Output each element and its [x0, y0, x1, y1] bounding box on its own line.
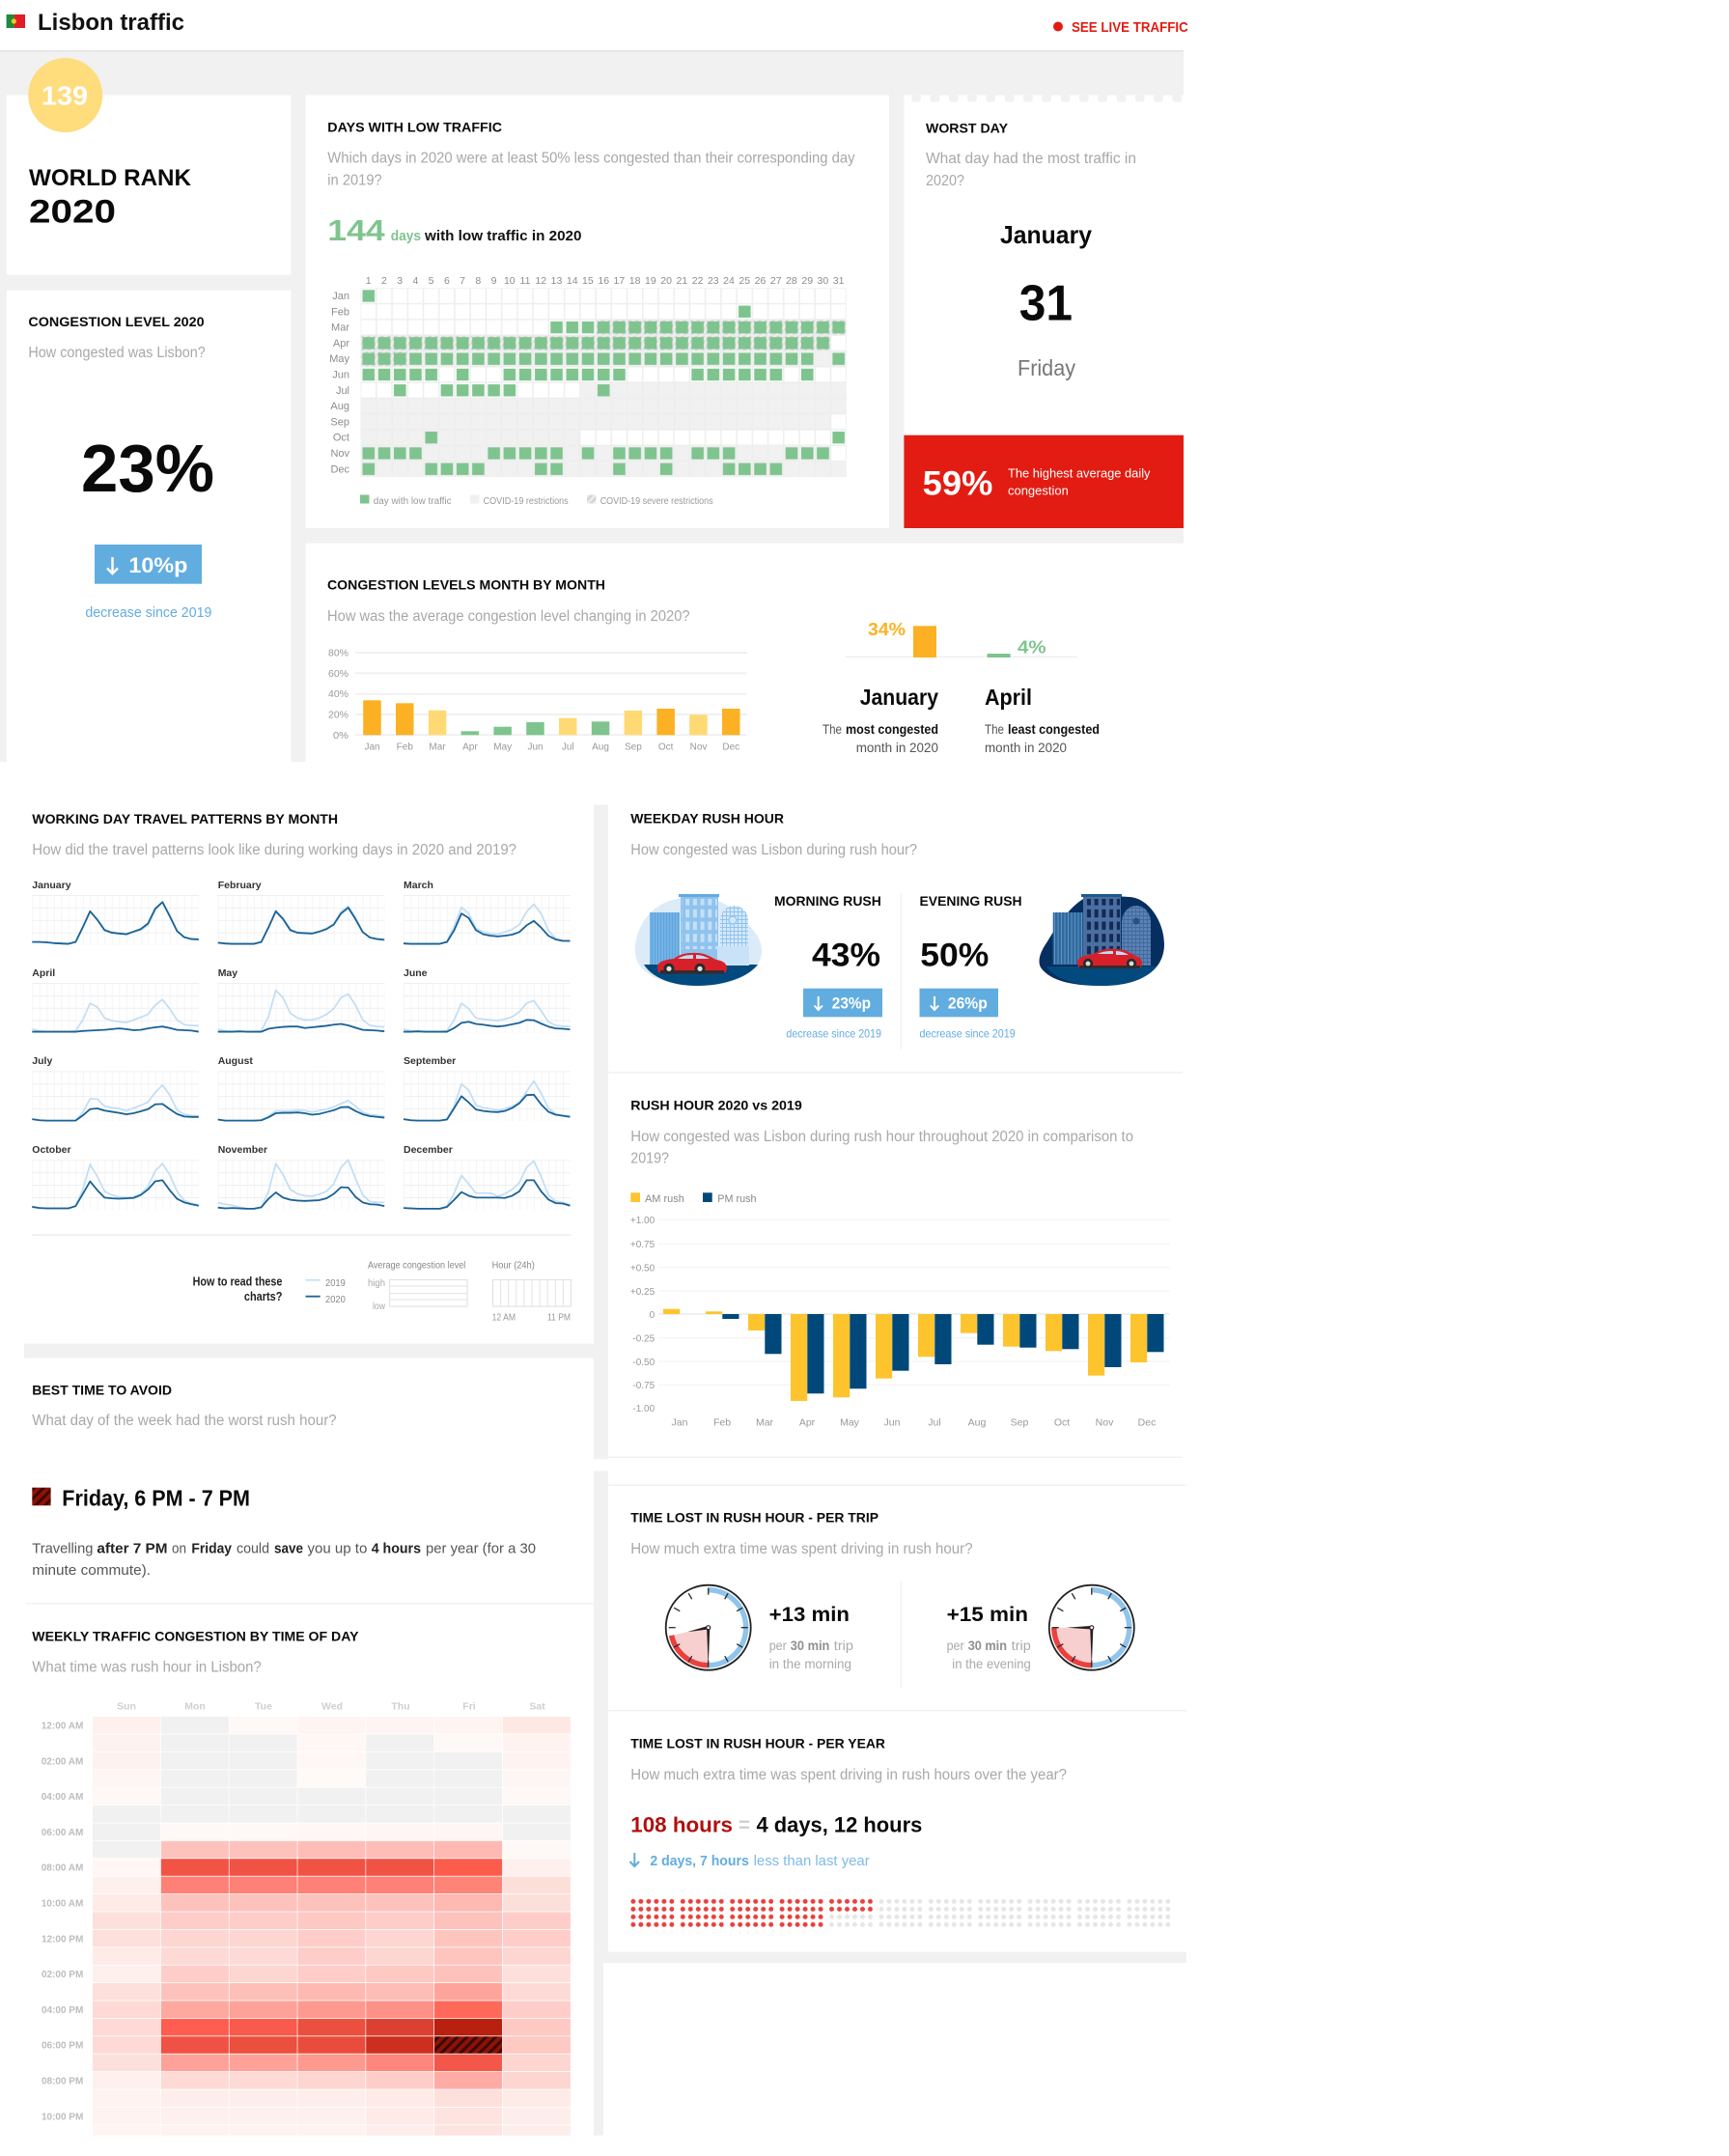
least congested month: The — [985, 722, 1004, 737]
total hours: 108 hours — [630, 1812, 733, 1836]
calendar day numbers: 22 — [692, 275, 704, 287]
chart key: Average congestion level — [368, 1261, 465, 1271]
rank year: 2020 — [29, 193, 116, 230]
big number: 23% — [81, 431, 214, 506]
heatmap hour labels: 06:00 PM — [42, 2041, 83, 2052]
live traffic link: SEE LIVE TRAFFIC — [1072, 19, 1188, 36]
heatmap hour labels: 02:00 PM — [42, 1970, 83, 1980]
bar chart: rush hour change: +0.25 — [630, 1287, 655, 1298]
chart key: 2020 — [325, 1294, 346, 1305]
small multiple: December — [404, 1144, 571, 1210]
change note: decrease since 2019 — [85, 604, 211, 621]
small multiple: July: July — [32, 1055, 52, 1067]
bar chart: rush hour change: May — [840, 1417, 860, 1429]
calendar day numbers: 25 — [739, 275, 750, 287]
morning time lost: in the morning — [769, 1657, 851, 1671]
calendar day numbers: 14 — [567, 275, 578, 287]
small multiple: December: December — [404, 1144, 453, 1156]
morning time lost: 30 min — [791, 1638, 829, 1653]
calendar month labels: Dec — [330, 463, 349, 475]
heatmap hour labels: 02:00 AM — [42, 1756, 83, 1767]
calendar day numbers: 21 — [676, 275, 687, 287]
panel: rush hour 2020 vs 2019 — [630, 1097, 1170, 1429]
heatmap cells — [93, 1717, 571, 2142]
icon: Portugal flag — [7, 14, 25, 28]
calendar month labels: Nov — [330, 448, 349, 460]
question — [327, 151, 855, 189]
heatmap hour labels: 08:00 AM — [42, 1863, 83, 1874]
small multiple: October: October — [32, 1144, 71, 1156]
divider — [32, 1234, 572, 1236]
bar chart: rush hour change — [630, 1216, 1170, 1429]
restriction shading — [361, 320, 847, 477]
morning time lost — [769, 1604, 853, 1671]
bar chart: monthly congestion: Nov — [690, 742, 707, 753]
icon: evening clock — [1049, 1585, 1134, 1670]
small multiple: May: May — [218, 967, 237, 979]
calendar day numbers: 1 — [366, 275, 372, 287]
heatmap weekday labels: Tue — [255, 1701, 272, 1713]
calendar grid — [361, 288, 847, 477]
evening rush stats: EVENING RUSH — [919, 893, 1022, 909]
heatmap hour labels — [42, 1721, 83, 2122]
most congested month: most congested — [846, 722, 938, 737]
bar chart: rush hour change: 0 — [650, 1310, 655, 1321]
stat: 144 days: days — [391, 228, 421, 244]
heatmap weekday labels: Wed — [321, 1701, 343, 1713]
bar chart: monthly congestion: Oct — [658, 742, 674, 753]
small multiple: August: August — [218, 1055, 253, 1067]
stat: 144 days: 144 — [327, 213, 386, 247]
chart key — [193, 1261, 572, 1323]
bar chart: rush hour change: Feb — [713, 1417, 731, 1429]
bar chart: monthly congestion: Feb — [397, 742, 413, 753]
question: Which days in 2020 were at least 50% less congested than their corresponding day — [327, 151, 855, 166]
question: How congested was Lisbon during rush hour throughout 2020 in comparison to — [630, 1129, 1133, 1145]
callout: highest daily congestion: congestion — [1008, 483, 1069, 498]
calendar day numbers: 17 — [614, 275, 625, 287]
bar chart: monthly congestion: 60% — [328, 669, 349, 680]
calendar day numbers: 2 — [381, 275, 387, 287]
panel: congestion level — [7, 291, 292, 762]
panel: worst day — [904, 96, 1184, 435]
calendar day numbers: 29 — [801, 275, 813, 287]
calendar day numbers: 8 — [475, 275, 481, 287]
most congested month — [823, 685, 938, 755]
small multiple: February: February — [218, 880, 262, 891]
icon: morning clock — [666, 1585, 751, 1670]
heatmap hour labels: 10:00 AM — [42, 1898, 83, 1910]
evening time lost: trip — [1012, 1638, 1031, 1653]
heading: TIME LOST IN RUSH HOUR - PER YEAR — [630, 1736, 885, 1751]
bar chart: rush hour change: Jul — [928, 1417, 941, 1429]
question: How much extra time was spent driving in rush hours over the year? — [630, 1767, 1067, 1783]
evening rush stats: decrease since 2019 — [919, 1027, 1016, 1041]
panel: weekday rush hour — [630, 811, 1164, 1050]
bar chart: monthly congestion: Jan — [364, 742, 380, 753]
calendar day numbers: 26 — [755, 275, 766, 287]
heading: TIME LOST IN RUSH HOUR - PER TRIP — [630, 1510, 878, 1526]
question: How congested was Lisbon? — [28, 345, 206, 361]
calendar month labels: Oct — [333, 433, 349, 444]
evening rush stats: 26%p — [948, 994, 988, 1012]
evening time lost — [947, 1604, 1031, 1671]
heatmap hour labels: 04:00 AM — [42, 1792, 83, 1803]
advice text: minute commute). — [32, 1562, 151, 1579]
question: in 2019? — [327, 172, 382, 189]
heatmap bottom crop — [87, 2136, 579, 2147]
callout: highest daily congestion: 59% — [923, 465, 992, 502]
panel: world rank — [7, 58, 292, 275]
bar chart: rush hour change: Jan — [672, 1417, 688, 1429]
heading: DAYS WITH LOW TRAFFIC — [327, 119, 502, 134]
advice text: on — [172, 1541, 186, 1556]
small multiple: March: March — [404, 880, 433, 891]
bar chart: rush hour change: +1.00 — [630, 1216, 655, 1226]
bar chart: rush hour change: Dec — [1138, 1417, 1156, 1429]
bar chart: monthly congestion: Jun — [527, 742, 544, 753]
small multiple: September — [404, 1055, 571, 1121]
rank badge: 139 — [42, 81, 88, 110]
total hours — [630, 1812, 922, 1836]
dot matrix: days lost — [630, 1899, 1170, 1930]
advice text: after 7 PM — [97, 1541, 168, 1556]
calendar day numbers: 28 — [786, 275, 797, 287]
bar chart: monthly congestion: Apr — [462, 742, 478, 753]
chart key: low — [373, 1302, 386, 1312]
panel: weekly traffic congestion — [32, 1628, 579, 2147]
bar chart: rush hour change: Oct — [1054, 1417, 1070, 1429]
bar chart: rush hour change: Nov — [1096, 1417, 1114, 1429]
total hours: = — [739, 1812, 750, 1836]
low traffic days — [361, 288, 847, 477]
evening time lost: +15 min — [947, 1604, 1028, 1626]
calendar day numbers: 24 — [723, 275, 735, 287]
heatmap hour labels: 06:00 AM — [42, 1828, 83, 1838]
heading: RUSH HOUR 2020 vs 2019 — [630, 1097, 802, 1112]
calendar month labels: Sep — [330, 416, 349, 428]
rank badge — [28, 58, 102, 132]
bar chart: rush hour change: Aug — [968, 1417, 986, 1429]
callout: highest daily congestion: The highest average daily — [1008, 465, 1151, 481]
calendar month labels: Feb — [331, 306, 349, 318]
morning time lost: trip — [834, 1638, 853, 1653]
calendar day numbers: 9 — [491, 275, 497, 287]
small multiple: August — [218, 1055, 384, 1121]
heatmap weekday labels: Sun — [117, 1701, 136, 1713]
small multiple: January: January — [32, 880, 71, 891]
mini chart: extremes: 4% — [1018, 637, 1046, 657]
chart key: 12 AM — [492, 1313, 516, 1323]
question: How was the average congestion level changing in 2020? — [327, 608, 690, 625]
question: How did the travel patterns look like during working days in 2020 and 2019? — [32, 842, 516, 858]
bar chart: monthly congestion: 80% — [328, 649, 349, 658]
calendar day numbers: 6 — [444, 275, 450, 287]
bar chart: rush hour change: Jun — [884, 1417, 901, 1429]
calendar day numbers: 3 — [397, 275, 403, 287]
question: What day of the week had the worst rush hour? — [32, 1413, 337, 1429]
callout: highest daily congestion — [904, 435, 1184, 528]
bar chart: rush hour change: Apr — [799, 1417, 816, 1429]
question: 2020? — [926, 173, 964, 189]
question: What day had the most traffic in — [926, 151, 1136, 167]
question — [630, 1129, 1133, 1166]
small multiple: November: November — [218, 1144, 267, 1156]
calendar month labels: Jul — [336, 385, 349, 397]
small multiple: June: June — [404, 967, 428, 979]
header bar — [0, 0, 1729, 52]
most congested month: January — [860, 685, 938, 710]
calendar day numbers: 7 — [460, 275, 465, 287]
bar chart: rush hour change: -1.00 — [632, 1404, 655, 1414]
heading: WORKING DAY TRAVEL PATTERNS BY MONTH — [32, 811, 338, 826]
chart key: Hour (24h) — [492, 1261, 535, 1271]
advice text — [32, 1541, 536, 1579]
heading: WORST DAY — [926, 120, 1009, 135]
mini chart: extremes — [846, 620, 1077, 658]
heading: CONGESTION LEVELS MONTH BY MONTH — [327, 577, 605, 593]
column divider strips: second section — [24, 805, 1186, 2136]
bar chart: rush hour change: -0.50 — [632, 1358, 655, 1368]
weekday: Friday — [1018, 355, 1075, 380]
calendar legend — [360, 494, 713, 507]
least congested month: least congested — [1008, 722, 1100, 737]
stat: 144 days — [327, 213, 581, 247]
heatmap hour labels: 04:00 PM — [42, 2005, 83, 2016]
change since last year — [629, 1853, 870, 1869]
calendar legend: COVID-19 severe restrictions — [600, 496, 713, 507]
change since last year: 2 days, 7 hours — [650, 1853, 749, 1869]
calendar month labels: Jan — [332, 291, 349, 302]
bar chart: monthly congestion: Mar — [429, 742, 446, 753]
evening time lost: 30 min — [968, 1638, 1007, 1653]
bar chart: monthly congestion: 20% — [328, 711, 349, 720]
small multiple: September: September — [404, 1055, 456, 1067]
small multiple: July — [32, 1055, 199, 1121]
question: 2019? — [630, 1151, 669, 1166]
small multiple: February — [218, 880, 384, 945]
calendar day numbers: 20 — [660, 275, 672, 287]
calendar legend: COVID-19 restrictions — [484, 496, 569, 507]
small multiple: November — [218, 1144, 384, 1210]
advice text: you up to — [307, 1541, 367, 1556]
bar chart: monthly congestion: Sep — [625, 742, 642, 753]
small multiple: May — [218, 967, 384, 1033]
chart key: How to read these — [193, 1274, 282, 1288]
panel: working day travel patterns — [32, 811, 572, 1323]
calendar day numbers: 16 — [598, 275, 609, 287]
calendar day numbers — [366, 275, 845, 287]
small multiple: January — [32, 880, 199, 945]
least congested month — [985, 685, 1100, 755]
evening time lost: per — [947, 1638, 964, 1653]
calendar month labels: Mar — [331, 322, 349, 334]
heading: WEEKDAY RUSH HOUR — [630, 811, 784, 826]
most congested month: month in 2020 — [856, 741, 938, 755]
chart key: 2019 — [325, 1277, 346, 1289]
calendar legend: day with low traffic — [374, 496, 452, 507]
small multiple: June — [404, 967, 571, 1033]
calendar day numbers: 18 — [629, 275, 641, 287]
panel: time lost per trip — [630, 1510, 1134, 1688]
calendar month labels: Jun — [332, 369, 349, 380]
calendar day numbers: 31 — [833, 275, 845, 287]
calendar month labels: May — [329, 353, 349, 365]
advice text: could — [237, 1541, 269, 1556]
page background: first section — [0, 51, 1184, 762]
panel: time lost per year — [629, 1736, 1170, 1930]
bar chart: monthly congestion: Aug — [592, 742, 609, 753]
heatmap weekday labels: Fri — [462, 1701, 476, 1713]
calendar month labels — [329, 291, 349, 475]
chart key: 11 PM — [547, 1313, 571, 1323]
heading: CONGESTION LEVEL 2020 — [28, 314, 205, 329]
bar chart: rush hour change: +0.75 — [630, 1240, 655, 1250]
small multiple: October — [32, 1144, 199, 1210]
bar chart: monthly congestion: 40% — [328, 689, 349, 700]
heading: WEEKLY TRAFFIC CONGESTION BY TIME OF DAY — [32, 1628, 359, 1643]
morning rush stats: 23%p — [832, 994, 871, 1012]
panel: days with low traffic — [305, 96, 889, 528]
legend: PM rush — [717, 1193, 757, 1205]
question: How much extra time was spent driving in rush hour? — [630, 1541, 973, 1557]
calendar day numbers: 5 — [429, 275, 434, 287]
morning time lost: per — [769, 1638, 787, 1653]
evening rush stats: 50% — [920, 938, 989, 974]
calendar day numbers: 15 — [582, 275, 594, 287]
panel: best time to avoid — [32, 1382, 536, 1579]
morning rush stats: 43% — [812, 938, 880, 974]
advice text: Travelling — [32, 1541, 93, 1556]
advice text: per year (for a 30 — [426, 1541, 536, 1556]
cell outlines — [361, 288, 847, 477]
calendar day numbers: 30 — [818, 275, 828, 287]
heading: BEST TIME TO AVOID — [32, 1382, 172, 1397]
stat: 144 days: with low traffic in 2020 — [424, 228, 581, 244]
bar chart: rush hour change: +0.50 — [630, 1263, 655, 1274]
heatmap hour labels: 08:00 PM — [42, 2076, 83, 2087]
calendar day numbers: 13 — [551, 275, 562, 287]
bar chart: monthly congestion: May — [493, 742, 512, 753]
bar chart: monthly congestion: Jul — [562, 742, 574, 753]
date: 31 — [1019, 275, 1073, 331]
icon: hatched cell — [32, 1488, 51, 1505]
calendar day numbers: 10 — [504, 275, 516, 287]
heatmap weekday labels: Mon — [184, 1701, 206, 1713]
bar chart: monthly congestion — [328, 649, 747, 753]
least congested month: month in 2020 — [985, 741, 1067, 755]
calendar month labels: Aug — [330, 401, 349, 412]
small multiple: April — [32, 967, 199, 1033]
vertical divider — [901, 893, 902, 1050]
question — [926, 151, 1136, 189]
calendar day numbers: 12 — [535, 275, 546, 287]
chart key: high — [368, 1278, 385, 1289]
title: Lisbon traffic — [38, 10, 184, 36]
change badge: 10%p — [128, 553, 187, 577]
morning rush stats: decrease since 2019 — [786, 1027, 881, 1041]
most congested month: The — [823, 722, 842, 737]
least congested month: April — [985, 685, 1032, 710]
calendar day numbers: 4 — [412, 275, 418, 287]
calendar month labels: Apr — [333, 338, 349, 350]
evening time lost: in the evening — [952, 1657, 1031, 1671]
change badge — [95, 545, 202, 584]
advice text: 4 hours — [372, 1541, 421, 1556]
calendar day numbers: 19 — [645, 275, 656, 287]
bar chart: rush hour change: -0.75 — [632, 1381, 655, 1391]
question: How congested was Lisbon during rush hour? — [630, 842, 917, 858]
small multiple: March — [404, 880, 571, 945]
month: January — [1000, 220, 1093, 249]
question: What time was rush hour in Lisbon? — [32, 1659, 262, 1676]
morning rush stats: MORNING RUSH — [774, 893, 881, 909]
bar chart: rush hour change: Mar — [756, 1417, 774, 1429]
calendar notches — [911, 96, 1184, 102]
legend — [630, 1192, 757, 1205]
total hours: 4 days, 12 hours — [757, 1812, 922, 1836]
morning rush stats — [774, 893, 882, 1041]
calendar day numbers: 11 — [520, 275, 531, 287]
bar chart: rush hour change: -0.25 — [632, 1334, 655, 1344]
worst time: Friday, 6 PM - 7 PM — [62, 1485, 250, 1510]
legend: AM rush — [645, 1193, 684, 1205]
bar chart: rush hour change: Sep — [1011, 1417, 1028, 1429]
advice text: save — [274, 1541, 303, 1556]
calendar day numbers: 27 — [770, 275, 782, 287]
illustration: morning city — [635, 894, 762, 986]
small multiple: April: April — [32, 967, 55, 979]
heatmap weekday labels: Thu — [391, 1701, 410, 1713]
heatmap weekday labels — [117, 1701, 545, 1713]
bar chart: monthly congestion: 0% — [333, 731, 349, 742]
heatmap hour labels: 12:00 PM — [42, 1934, 83, 1945]
heatmap hour labels: 10:00 PM — [42, 2112, 83, 2122]
bar chart: monthly congestion: Dec — [722, 742, 739, 753]
calendar day numbers: 23 — [708, 275, 719, 287]
heatmap hour labels: 12:00 AM — [42, 1721, 83, 1732]
morning time lost: +13 min — [769, 1604, 850, 1626]
change since last year: less than last year — [754, 1853, 870, 1869]
advice text: Friday — [191, 1541, 233, 1556]
evening rush stats — [919, 893, 1022, 1041]
illustration: evening city — [1039, 894, 1164, 986]
panel: congestion levels month by month — [306, 544, 1184, 762]
vertical divider — [901, 1582, 902, 1688]
heading: world rank: WORLD RANK — [29, 165, 192, 191]
chart key: charts? — [244, 1290, 282, 1303]
mini chart: extremes: 34% — [868, 620, 906, 639]
heatmap weekday labels: Sat — [529, 1701, 545, 1713]
